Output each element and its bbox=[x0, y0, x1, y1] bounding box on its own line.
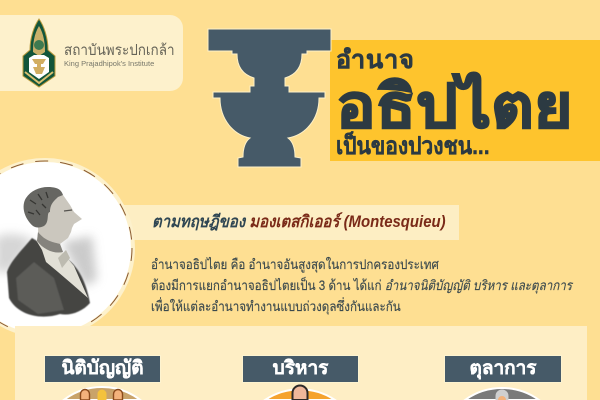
portrait of Montesquieu bbox=[0, 158, 135, 333]
body text: เพื่อให้แต่ละอำนาจทำงานแบบถ่วงดุลซึ่งกันและกัน bbox=[151, 299, 401, 314]
icon: institute crest bbox=[22, 18, 56, 88]
circle: judicial bbox=[464, 387, 540, 400]
icon: phan tray bbox=[208, 28, 332, 168]
circle: legislative bbox=[62, 386, 142, 400]
institute english name: King Prajadhipok's Institute bbox=[64, 59, 154, 68]
title line 3: เป็นของปวงชน... bbox=[336, 133, 490, 160]
body text bbox=[151, 256, 574, 315]
panel: logo bbox=[0, 15, 183, 91]
heading: judicial: ตุลาการ bbox=[469, 358, 537, 379]
heading: executive: บริหาร bbox=[273, 358, 328, 379]
heading: legislative: นิติบัญญัติ bbox=[61, 358, 144, 379]
body text: อำนาจอธิปไตย คือ อำนาจอันสูงสุดในการปกครองประเทศ bbox=[151, 257, 439, 272]
heading: legislative bbox=[45, 356, 160, 382]
title line 2: อธิปไตย bbox=[336, 73, 573, 140]
body text: ต้องมีการแยกอำนาจอธิปไตยเป็น 3 ด้าน ได้แก่ อำนาจนิติบัญญัติ บริหาร และตุลาการ bbox=[151, 278, 572, 293]
theory heading strip bbox=[100, 205, 459, 240]
theory heading text: ตามทฤษฎีของ มองเตสกิเออร์ (Montesquieu) bbox=[152, 213, 446, 231]
title line 1: อำนาจ bbox=[336, 46, 415, 74]
panel: three powers bbox=[15, 326, 587, 400]
institute name: สถาบันพระปกเกล้า bbox=[64, 42, 175, 59]
circle: executive bbox=[264, 384, 336, 400]
banner bbox=[330, 40, 600, 161]
heading: executive bbox=[243, 356, 358, 382]
heading: judicial bbox=[445, 356, 561, 382]
